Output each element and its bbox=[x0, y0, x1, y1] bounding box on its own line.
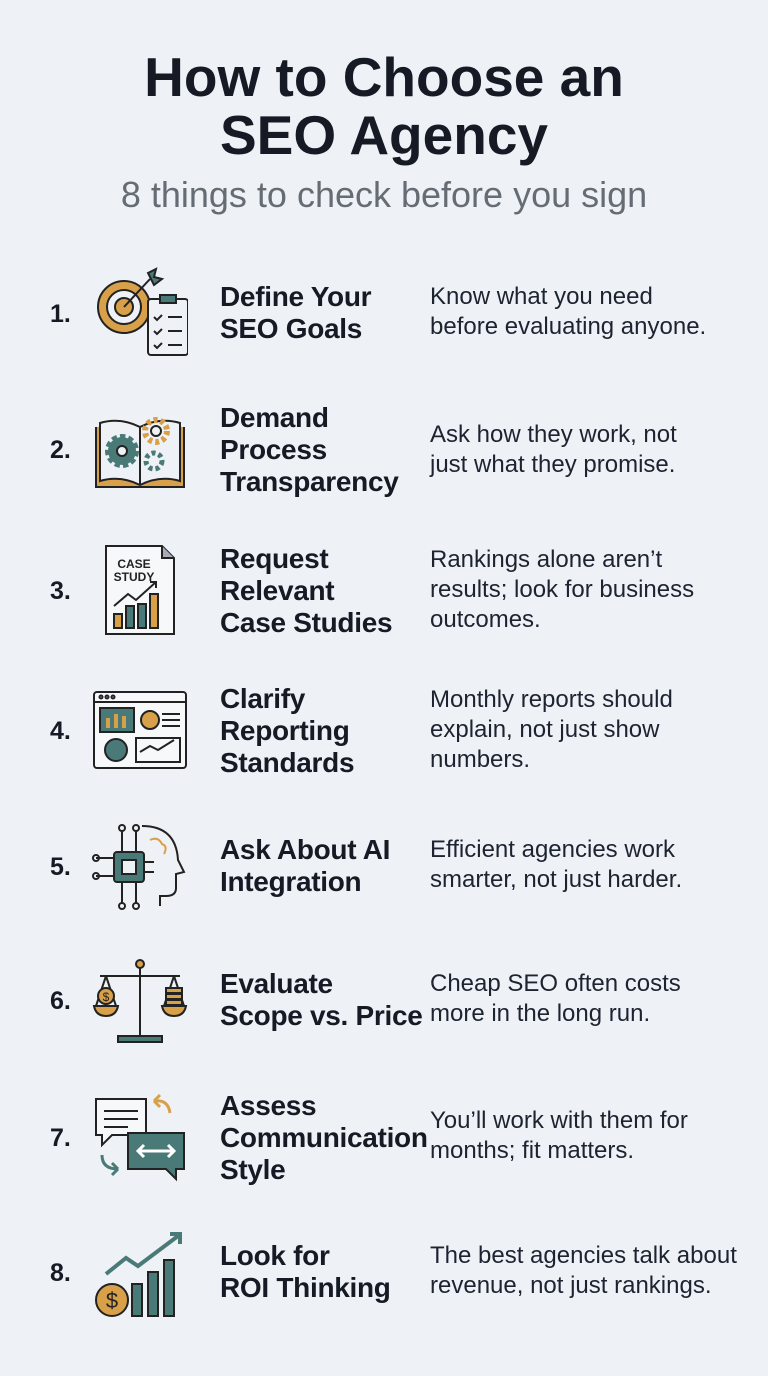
row 4 bbox=[50, 683, 673, 778]
heading: Evaluate bbox=[220, 968, 333, 999]
description bbox=[430, 1242, 737, 1299]
description: more in the long run. bbox=[430, 1000, 650, 1027]
heading: Demand bbox=[220, 402, 329, 433]
heading: Process bbox=[220, 434, 327, 465]
description: results; look for business bbox=[430, 576, 694, 603]
description: months; fit matters. bbox=[430, 1137, 634, 1164]
description: Ask how they work, not bbox=[430, 421, 677, 448]
icon: AI head bbox=[92, 824, 186, 910]
row 1: 1. bbox=[50, 300, 71, 328]
icon: dashboard bbox=[93, 691, 187, 769]
heading bbox=[220, 402, 399, 497]
icon: chat bubbles bbox=[95, 1094, 185, 1182]
icon: ROI chart bbox=[95, 1232, 182, 1317]
description bbox=[430, 1107, 688, 1164]
row 7: 7. bbox=[50, 1124, 71, 1152]
row 5: 5. bbox=[50, 853, 71, 881]
row 6: 6. bbox=[50, 987, 71, 1015]
icon: scales: $ bbox=[103, 990, 110, 1004]
row 4: 4. bbox=[50, 717, 71, 745]
description: explain, not just show bbox=[430, 716, 659, 743]
heading bbox=[220, 968, 423, 1031]
heading: Clarify bbox=[220, 683, 305, 714]
description: revenue, not just rankings. bbox=[430, 1272, 712, 1299]
heading bbox=[220, 834, 390, 897]
icon: scales bbox=[92, 959, 188, 1043]
title: How to Choose an bbox=[144, 46, 624, 108]
description: Know what you need bbox=[430, 283, 653, 310]
title bbox=[144, 46, 624, 166]
description bbox=[430, 836, 682, 893]
row 8 bbox=[50, 1232, 737, 1317]
heading: SEO Goals bbox=[220, 313, 362, 344]
row 7 bbox=[50, 1090, 688, 1185]
heading: Relevant bbox=[220, 575, 334, 606]
heading bbox=[220, 1240, 391, 1303]
heading: Case Studies bbox=[220, 607, 392, 638]
description: just what they promise. bbox=[430, 451, 675, 478]
heading: Look for bbox=[220, 1240, 330, 1271]
title: SEO Agency bbox=[220, 104, 548, 166]
description: Efficient agencies work bbox=[430, 836, 675, 863]
description: Cheap SEO often costs bbox=[430, 970, 681, 997]
row 6 bbox=[50, 959, 681, 1043]
subtitle: 8 things to check before you sign bbox=[121, 174, 647, 215]
icon: target and checklist bbox=[97, 267, 188, 356]
row 3 bbox=[50, 543, 694, 638]
row 8: 8. bbox=[50, 1259, 71, 1287]
heading: Communication bbox=[220, 1122, 428, 1153]
row 1 bbox=[50, 267, 706, 356]
heading: Request bbox=[220, 543, 328, 574]
description: Monthly reports should bbox=[430, 686, 673, 713]
description bbox=[429, 421, 677, 478]
heading: Scope vs. Price bbox=[220, 1000, 423, 1031]
heading bbox=[220, 543, 392, 638]
icon: book with gears bbox=[95, 417, 185, 488]
heading: Define Your bbox=[220, 281, 371, 312]
row 3: 3. bbox=[50, 577, 71, 605]
heading: Reporting bbox=[220, 715, 350, 746]
heading: Ask About AI bbox=[220, 834, 390, 865]
description: numbers. bbox=[430, 746, 530, 773]
description bbox=[430, 546, 694, 633]
row 2 bbox=[50, 402, 677, 497]
heading: Transparency bbox=[220, 466, 398, 497]
description: before evaluating anyone. bbox=[430, 313, 706, 340]
description: Rankings alone aren’t bbox=[430, 546, 662, 573]
heading: Standards bbox=[220, 747, 354, 778]
heading: ROI Thinking bbox=[220, 1272, 391, 1303]
description bbox=[430, 686, 673, 773]
row 2: 2. bbox=[50, 436, 71, 464]
heading: Style bbox=[220, 1154, 285, 1185]
heading: Assess bbox=[220, 1090, 316, 1121]
description: outcomes. bbox=[430, 606, 541, 633]
heading bbox=[220, 1090, 428, 1185]
icon: case study document bbox=[105, 545, 175, 635]
icon: case study document: STUDY bbox=[114, 570, 154, 584]
heading: Integration bbox=[220, 866, 361, 897]
description: You’ll work with them for bbox=[430, 1107, 688, 1134]
row 5 bbox=[50, 824, 682, 910]
description bbox=[430, 283, 706, 340]
heading bbox=[220, 281, 372, 344]
description: The best agencies talk about bbox=[430, 1242, 737, 1269]
description: smarter, not just harder. bbox=[430, 866, 682, 893]
icon: ROI chart: $ bbox=[106, 1288, 118, 1313]
heading bbox=[220, 683, 354, 778]
description bbox=[430, 970, 681, 1027]
icon: case study document: CASE bbox=[117, 557, 151, 571]
